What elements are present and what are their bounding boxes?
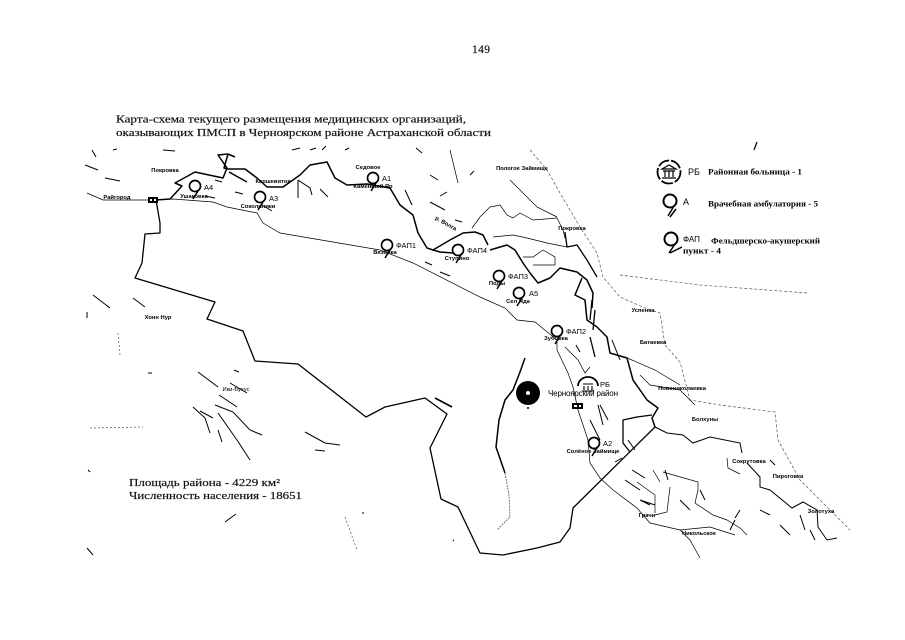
icon: legend feldsher pin bbox=[664, 232, 682, 253]
icon: legend hospital bbox=[658, 160, 680, 184]
map: lake and west river bbox=[496, 358, 540, 530]
medical point labels: ФАП3 bbox=[508, 272, 528, 281]
title: Карта-схема текущего размещения медицинских организаций, bbox=[116, 114, 466, 126]
legend: hospital text: РБ bbox=[688, 167, 700, 177]
settlement labels: Сел Яда bbox=[506, 299, 531, 305]
title bbox=[116, 114, 491, 139]
medical point labels: А5 bbox=[529, 289, 538, 298]
settlement labels: Болхуны bbox=[692, 417, 718, 423]
title: оказывающих ПМСП в Черноярском районе Астраханской области bbox=[116, 127, 491, 139]
icon: pin A3 bbox=[254, 192, 266, 210]
map: road and rivers bbox=[87, 150, 850, 558]
icon: district hospital bbox=[578, 377, 598, 391]
icon: pin A2 bbox=[588, 438, 600, 456]
medical point labels: ФАП1 bbox=[396, 241, 416, 250]
settlement labels: Каменный Яр bbox=[353, 183, 393, 190]
settlement labels: Батаевка bbox=[640, 340, 667, 346]
legend: ambulatory text: А bbox=[683, 197, 689, 207]
settlement labels: Покровка bbox=[151, 168, 179, 174]
medical point labels: А1 bbox=[382, 174, 391, 183]
medical point labels: А4 bbox=[204, 183, 213, 192]
settlement labels: Грачи bbox=[639, 513, 656, 519]
legend: hospital text bbox=[688, 167, 802, 177]
settlement labels: Седовое bbox=[356, 165, 381, 171]
legend: feldsher text bbox=[683, 235, 820, 256]
medical point labels: ФАП4 bbox=[467, 246, 487, 255]
icon: pin FAP1 bbox=[382, 240, 392, 258]
icon: pin FAP3 bbox=[494, 270, 504, 289]
settlement labels: Новониколаевка bbox=[658, 386, 707, 392]
medical point labels bbox=[204, 174, 618, 448]
district statistics bbox=[129, 477, 302, 502]
settlement labels: Сокольники bbox=[241, 204, 276, 210]
medical point labels: Черноярский район bbox=[548, 389, 618, 398]
medical point labels: А2 bbox=[603, 439, 612, 448]
settlement labels: Успенка bbox=[632, 308, 655, 314]
medical point labels: ФАП2 bbox=[566, 327, 586, 336]
district statistics: Численность населения - 18651 bbox=[129, 490, 302, 502]
settlement labels: Покровка bbox=[558, 226, 586, 232]
settlement labels: Солёное Займище bbox=[567, 448, 620, 455]
legend: ambulatory text bbox=[683, 197, 818, 208]
legend: feldsher text: пункт - 4 bbox=[683, 246, 721, 256]
settlement labels: Никольское bbox=[682, 531, 717, 537]
settlement labels: Каршевитое bbox=[255, 179, 291, 185]
stray mark bbox=[754, 142, 757, 150]
icon: pin A4 bbox=[190, 180, 200, 199]
icon: pin FAP4 bbox=[452, 244, 464, 263]
settlement labels: Поды bbox=[489, 281, 505, 287]
map: district boundary bbox=[135, 154, 658, 555]
map: small terrain marks bbox=[85, 146, 815, 555]
road signs bbox=[148, 197, 583, 409]
settlement labels: Пироговка bbox=[773, 474, 804, 480]
icon: legend ambulatory pin bbox=[664, 194, 676, 217]
settlement labels: Ступино bbox=[445, 256, 470, 262]
district statistics: Площадь района - 4229 км² bbox=[129, 477, 281, 489]
settlement labels: р. Волга bbox=[434, 216, 458, 233]
page number: 149 bbox=[472, 44, 490, 56]
icon: pin FAP2 bbox=[552, 326, 562, 344]
legend: hospital text: Районная больница - 1 bbox=[708, 168, 802, 176]
settlement labels: Ики-Бухус bbox=[222, 387, 250, 393]
legend: ambulatory text: Врачебная амбулатория - 5 bbox=[708, 200, 818, 208]
settlement labels: Зубовка bbox=[544, 335, 569, 342]
settlement labels: Сокрутовка bbox=[732, 459, 766, 465]
icon: pin A5 bbox=[514, 288, 524, 306]
medical point labels: РБ bbox=[600, 380, 610, 389]
legend bbox=[658, 160, 820, 256]
legend: feldsher text: Фельдшерско-акушерский bbox=[711, 236, 820, 246]
settlement labels: Райгород bbox=[103, 194, 131, 201]
settlement labels: Ушаковка bbox=[180, 194, 209, 200]
settlement labels: Вязовка bbox=[373, 250, 398, 256]
settlement labels: Золотуха bbox=[808, 509, 835, 515]
medical point labels: А3 bbox=[269, 194, 278, 203]
icon: pin A1 bbox=[368, 172, 378, 191]
legend: feldsher text: ФАП bbox=[683, 235, 700, 244]
settlement labels: Пологое Займище bbox=[496, 165, 549, 172]
settlement labels: Хонн Нур bbox=[145, 315, 172, 321]
settlement labels bbox=[103, 165, 835, 537]
